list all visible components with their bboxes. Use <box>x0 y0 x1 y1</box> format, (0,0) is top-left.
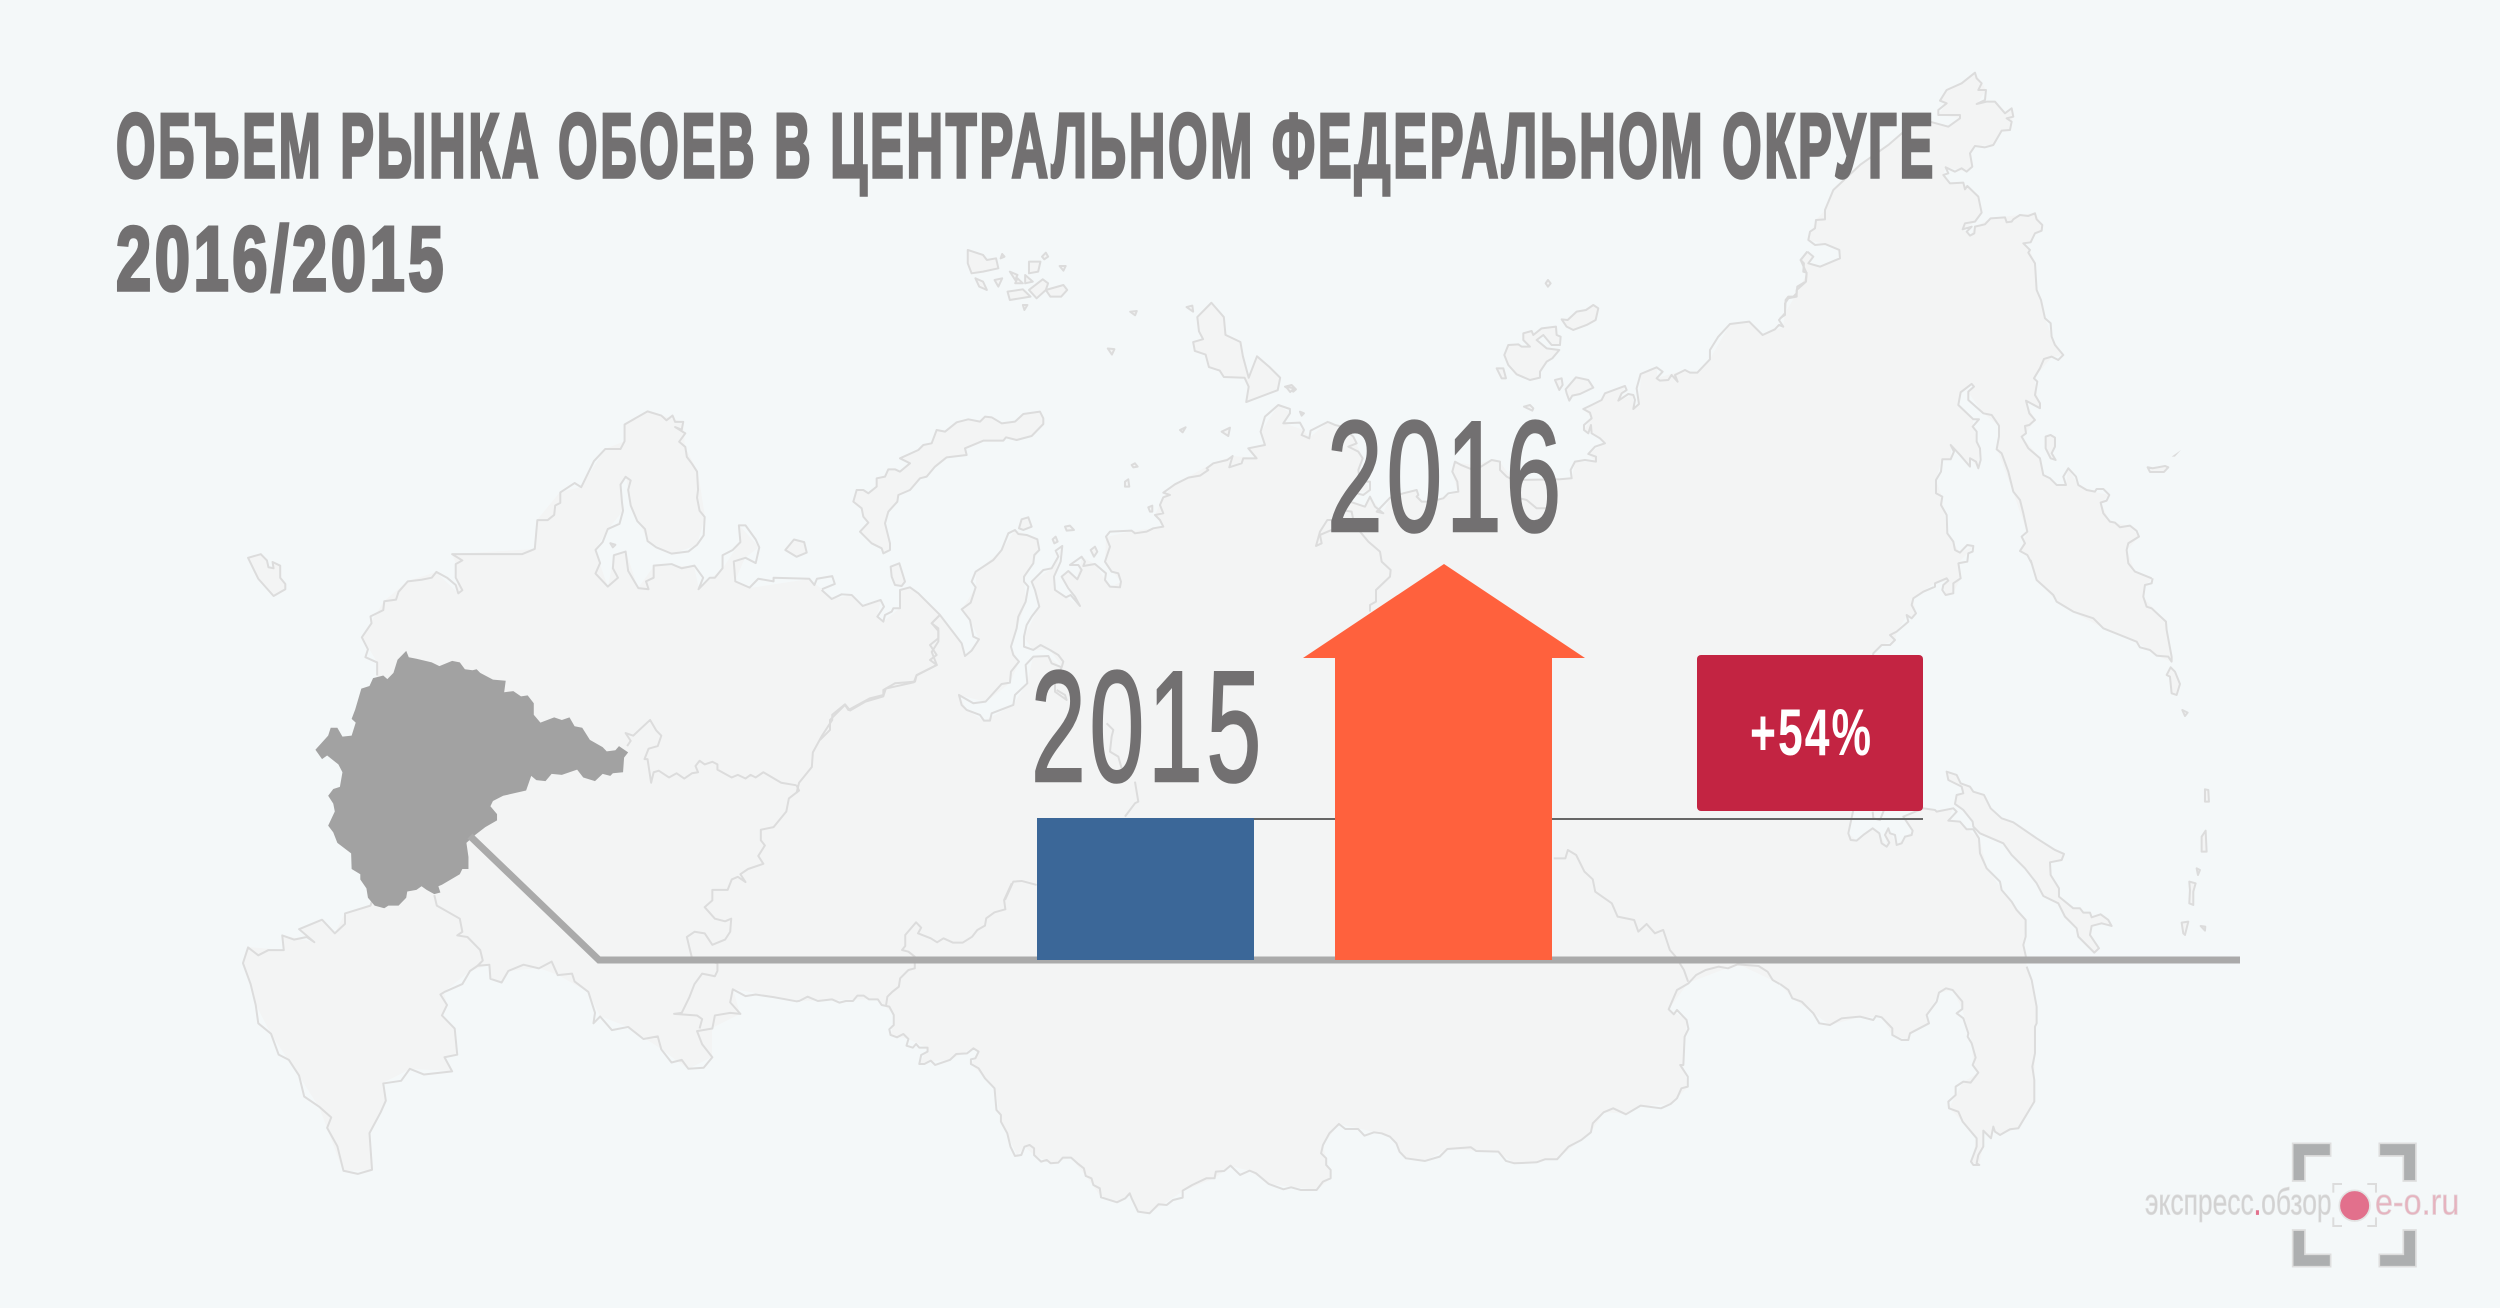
western coast and rivers, small islands <box>243 411 939 1174</box>
southern border <box>800 883 1780 1213</box>
subtitle years: 2016/2015 <box>116 209 447 310</box>
label 2015: 2015 <box>1031 639 1265 815</box>
Franz Josef Land islands <box>968 250 1067 310</box>
logo: экспресс.обзор e-o.ru <box>2145 1143 2459 1267</box>
Severnaya Zemlya islands <box>1108 303 1294 402</box>
leader line from region to chart baseline <box>470 836 2240 960</box>
map of Russia <box>243 73 2209 1213</box>
logo: экспресс.обзор e-o.ru: e-o.ru <box>2375 1180 2459 1222</box>
Kamchatka, Sea of Okhotsk coast, Sakhalin and Kuril islands <box>1848 560 2209 960</box>
logo: экспресс.обзор e-o.ru: экспресс.обзор <box>2145 1180 2332 1222</box>
bar 2015 <box>1037 818 1254 960</box>
Central Federal District highlighted region <box>315 651 628 908</box>
northern coast, Novaya Zemlya and Ob gulf <box>820 385 1328 900</box>
callout +54% <box>1697 655 1923 811</box>
Far East coast and Commander islands <box>1780 73 2181 578</box>
eastern river line <box>1554 850 1688 982</box>
reference line at 2015 level <box>1254 818 1923 820</box>
land fill <box>243 73 2172 1213</box>
Primorye coast <box>1780 967 2037 1165</box>
callout +54%: +54% <box>1750 695 1873 769</box>
Taymyr coast and New Siberian islands <box>1316 252 1807 612</box>
arrow bar 2016 <box>1303 564 1585 960</box>
label 2016: 2016 <box>1327 389 1565 565</box>
